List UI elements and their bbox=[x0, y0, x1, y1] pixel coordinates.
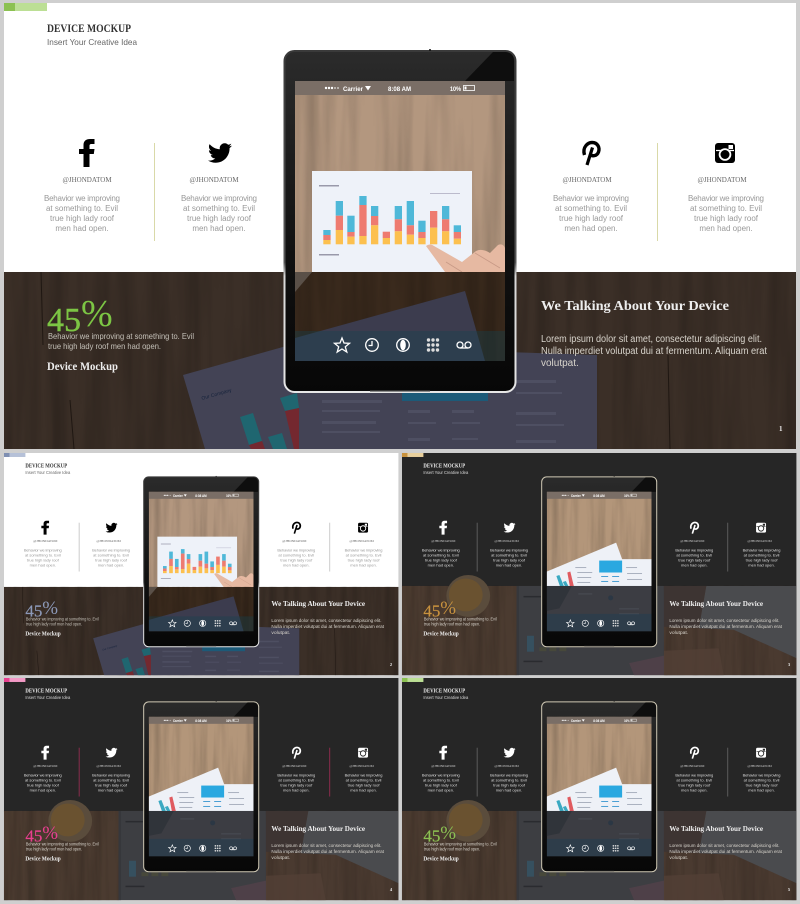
slide 4: small dark variant, pink accent: true high lady roof bbox=[348, 783, 380, 788]
slide 3: small dark variant, tan accent: Behavior we improving bbox=[422, 548, 460, 553]
text block: we talking: Nulla imperdiet volutpat dui at fermentum. Aliquam erat bbox=[541, 346, 767, 357]
social: instagram: true high lady roof bbox=[694, 214, 759, 223]
slide 2: small light variant: men had open. bbox=[30, 563, 56, 568]
slide 4: small dark variant, pink accent: Insert Your Creative Idea bbox=[25, 695, 71, 700]
slide 5: small dark variant, green accent: volutpat. bbox=[669, 855, 688, 861]
slide 4: small dark variant, pink accent: DEVICE MOCKUP bbox=[25, 688, 68, 694]
social: pinterest: at something to. Evil bbox=[555, 204, 627, 213]
slide 4: small dark variant, pink accent: Nulla imperdiet volutpat dui at fermentum. Aliquam erat bbox=[271, 849, 385, 855]
slide 2: small light variant: true high lady roof bbox=[27, 558, 60, 563]
slide 3: small dark variant, tan accent: % bbox=[440, 598, 456, 619]
slide 3: small dark variant, tan accent: true high lady roof bbox=[746, 558, 778, 563]
stat: 45%: 45 bbox=[47, 302, 81, 339]
device mockup bbox=[284, 49, 516, 392]
slide 3: small dark variant, tan accent: We Talking About Your Device bbox=[669, 600, 763, 608]
slide 5: small dark variant, green accent: Behavior we improving at something to. Evil bbox=[424, 841, 497, 846]
slide 2: small light variant: men had open. bbox=[98, 563, 124, 568]
slide 5: small dark variant, green accent: Insert Your Creative Idea bbox=[423, 695, 469, 700]
slide 2: small light variant: Behavior we improving at something to. Evil bbox=[26, 616, 99, 621]
page number: 1 bbox=[779, 425, 783, 433]
slide 2: small light variant: at something to. Evil bbox=[93, 553, 129, 558]
slide 4: small dark variant, pink accent: at something to. Evil bbox=[93, 778, 129, 783]
slide 3: small dark variant, tan accent: @JHONDATOM bbox=[494, 539, 519, 543]
social: facebook: Behavior we improving bbox=[44, 194, 120, 203]
slide 5: small dark variant, green accent: @JHONDATOM bbox=[494, 764, 519, 768]
slide 3: small dark variant, tan accent: at something to. Evil bbox=[676, 553, 712, 558]
slide 5: small dark variant, green accent: DEVICE MOCKUP bbox=[423, 688, 466, 694]
slide 5: small dark variant, green accent: @JHONDATOM bbox=[680, 764, 704, 768]
slide 5: small dark variant, green accent: true high lady roof bbox=[678, 783, 711, 788]
slide 4: small dark variant, pink accent: 8:08 AM bbox=[195, 719, 207, 723]
social: pinterest: Behavior we improving bbox=[553, 194, 629, 203]
slide 4: small dark variant, pink accent: volutpat. bbox=[271, 855, 290, 861]
slide 4: small dark variant, pink accent: true high lady roof men had open. bbox=[26, 846, 82, 851]
social: facebook: at something to. Evil bbox=[46, 204, 118, 213]
slide 2: small light variant: men had open. bbox=[283, 563, 310, 568]
slide 4: small dark variant, pink accent: true high lady roof bbox=[27, 783, 60, 788]
slide 5: small dark variant, green accent: at something to. Evil bbox=[676, 778, 712, 783]
stat: 45%: Device Mockup bbox=[47, 359, 118, 373]
stat: 45% bbox=[47, 293, 194, 373]
slide 4: small dark variant, pink accent: @JHONDATOM bbox=[96, 764, 121, 768]
slide 4: small dark variant, pink accent: Behavior we improving at something to. Evil bbox=[26, 841, 99, 846]
slide 4: small dark variant, pink accent: at something to. Evil bbox=[25, 778, 61, 783]
text block: we talking: We Talking About Your Device bbox=[541, 299, 729, 314]
social: pinterest bbox=[553, 142, 629, 233]
slide 2: small light variant: @JHONDATOM bbox=[33, 539, 57, 543]
slide 2: small light variant: volutpat. bbox=[271, 630, 290, 636]
slide 4: small dark variant, pink accent: at something to. Evil bbox=[278, 778, 314, 783]
slide 3: small dark variant, tan accent: men had open. bbox=[748, 563, 775, 568]
slide 4: small dark variant, pink accent: Behavior we improving bbox=[24, 773, 62, 778]
social: twitter bbox=[181, 143, 257, 233]
social: instagram: at something to. Evil bbox=[690, 204, 762, 213]
slide 4: small dark variant, pink accent: % bbox=[42, 823, 58, 844]
social: facebook bbox=[44, 139, 120, 233]
slide 5: small dark variant, green accent: Nulla imperdiet volutpat dui at fermentum. Aliquam erat bbox=[669, 849, 783, 855]
slide 3: small dark variant, tan accent: Lorem ipsum dolor sit amet, consectetur adipiscing elit. bbox=[669, 618, 779, 624]
slide 4: small dark variant, pink accent: We Talking About Your Device bbox=[271, 825, 365, 833]
social: twitter: @JHONDATOM bbox=[189, 176, 239, 184]
slide 2: small light variant: @JHONDATOM bbox=[349, 539, 374, 543]
slide 4: small dark variant, pink accent: @JHONDATOM bbox=[349, 764, 374, 768]
social: facebook: men had open. bbox=[55, 224, 109, 233]
slide 2: small light variant: Lorem ipsum dolor sit amet, consectetur adipiscing elit. bbox=[271, 618, 381, 624]
slide 4: small dark variant, pink accent: 10% bbox=[226, 719, 232, 723]
slide 5: small dark variant, green accent: Behavior we improving bbox=[743, 773, 780, 778]
slide 2: small light variant: 45 bbox=[25, 601, 42, 620]
slide 5: small dark variant, green accent: @JHONDATOM bbox=[431, 764, 455, 768]
slide 5: small dark variant, green accent: Carrier bbox=[571, 719, 581, 723]
slide 2: small light variant: 10% bbox=[226, 494, 232, 498]
slide 5: small dark variant, green accent: @JHONDATOM bbox=[747, 764, 772, 768]
slide 4: small dark variant, pink accent: 4 bbox=[390, 887, 393, 892]
slide 3: small dark variant, tan accent: @JHONDATOM bbox=[680, 539, 704, 543]
slide 5: small dark variant, green accent: true high lady roof bbox=[746, 783, 778, 788]
slide 3: small dark variant, tan accent: Behavior we improving at something to. Evil bbox=[424, 616, 497, 621]
slide 4: small dark variant, pink accent: Carrier bbox=[173, 719, 183, 723]
social: facebook: true high lady roof bbox=[50, 214, 115, 223]
slide 5: small dark variant, green accent: men had open. bbox=[496, 788, 522, 793]
slide 5: small dark variant, green accent: Behavior we improving bbox=[490, 773, 528, 778]
slide 3: small dark variant, tan accent: Behavior we improving bbox=[675, 548, 713, 553]
slide 2: small light variant: We Talking About Your Device bbox=[271, 600, 365, 608]
social: twitter: Behavior we improving bbox=[181, 194, 257, 203]
slide 5: small dark variant, green accent: men had open. bbox=[748, 788, 775, 793]
device mockup: Carrier bbox=[343, 86, 363, 93]
slide 5: small dark variant, green accent: at something to. Evil bbox=[744, 778, 780, 783]
slide 4: small dark variant, pink accent: Behavior we improving bbox=[277, 773, 315, 778]
slide 3: small dark variant, tan accent: true high lady roof bbox=[425, 558, 458, 563]
slide 3: small dark variant, tan accent: Carrier bbox=[571, 494, 581, 498]
stat: 45%: % bbox=[81, 293, 113, 335]
slide 3: small dark variant, tan accent: Nulla imperdiet volutpat dui at fermentum. Aliquam erat bbox=[669, 624, 783, 630]
title bbox=[47, 23, 137, 47]
slide 2: small light variant: 2 bbox=[390, 662, 393, 667]
slide 4: small dark variant, pink accent: men had open. bbox=[98, 788, 124, 793]
slide 1: large light device mockup bbox=[4, 3, 796, 449]
slide 3: small dark variant, tan accent: volutpat. bbox=[669, 630, 688, 636]
slide 3: small dark variant, tan accent: men had open. bbox=[681, 563, 708, 568]
title: Insert Your Creative Idea bbox=[47, 37, 137, 47]
slide 3: small dark variant, tan accent: true high lady roof bbox=[678, 558, 711, 563]
social: instagram: men had open. bbox=[699, 224, 753, 233]
slide 4: small dark variant, pink accent: Behavior we improving bbox=[345, 773, 382, 778]
social: instagram: @JHONDATOM bbox=[697, 176, 747, 184]
slide 3: small dark variant, tan accent: men had open. bbox=[428, 563, 454, 568]
slide 3: small dark variant, tan accent: true high lady roof men had open. bbox=[424, 621, 480, 626]
social: twitter: true high lady roof bbox=[187, 214, 252, 223]
slide 3: small dark variant, tan accent: true high lady roof bbox=[493, 558, 526, 563]
slide 3: small dark variant, tan accent: Device Mockup bbox=[423, 632, 459, 638]
slide 2: small light variant: true high lady roof bbox=[348, 558, 380, 563]
slide 2: small light variant: Carrier bbox=[173, 494, 183, 498]
social: pinterest: @JHONDATOM bbox=[562, 176, 612, 184]
social: instagram: Behavior we improving bbox=[688, 194, 764, 203]
slide 5: small dark variant, green accent: 5 bbox=[788, 887, 791, 892]
slide 3: small dark variant, tan accent: men had open. bbox=[496, 563, 522, 568]
slide 2: small light variant: men had open. bbox=[350, 563, 377, 568]
slide 5: small dark variant, green accent: % bbox=[440, 823, 456, 844]
slide 3: small dark variant, tan accent: 45 bbox=[423, 601, 440, 620]
slide 2: small light variant: at something to. Evil bbox=[25, 553, 61, 558]
text block: we talking bbox=[541, 299, 767, 369]
slide 3: small dark variant, tan accent: Behavior we improving bbox=[490, 548, 528, 553]
social: facebook: @JHONDATOM bbox=[62, 176, 112, 184]
slide 5: small dark variant, green accent: true high lady roof bbox=[425, 783, 458, 788]
slide 5: small dark variant, green accent: We Talking About Your Device bbox=[669, 825, 763, 833]
slide 2: small light variant: DEVICE MOCKUP bbox=[25, 463, 68, 469]
slide 4: small dark variant, pink accent: men had open. bbox=[350, 788, 377, 793]
dark photo band bbox=[4, 272, 796, 449]
slide 3: small dark variant, tan accent bbox=[402, 453, 796, 675]
slide 2: small light variant bbox=[4, 453, 398, 675]
slide 3: small dark variant, tan accent: at something to. Evil bbox=[423, 553, 459, 558]
slide 4: small dark variant, pink accent: men had open. bbox=[283, 788, 310, 793]
title: DEVICE MOCKUP bbox=[47, 23, 131, 35]
text block: we talking: Lorem ipsum dolor sit amet, consectetur adipiscing elit. bbox=[541, 334, 762, 345]
slide 5: small dark variant, green accent bbox=[402, 678, 796, 900]
slide 2: small light variant: Behavior we improving bbox=[345, 548, 382, 553]
device mockup: 8:08 AM bbox=[388, 86, 411, 93]
stat: 45%: true high lady roof men had open. bbox=[48, 341, 161, 351]
slide 5: small dark variant, green accent: Device Mockup bbox=[423, 857, 459, 863]
slide 3: small dark variant, tan accent: 8:08 AM bbox=[593, 494, 605, 498]
slide 3: small dark variant, tan accent: at something to. Evil bbox=[491, 553, 527, 558]
slide 5: small dark variant, green accent: 8:08 AM bbox=[593, 719, 605, 723]
slide 5: small dark variant, green accent: men had open. bbox=[428, 788, 454, 793]
slide 5: small dark variant, green accent: men had open. bbox=[681, 788, 708, 793]
slide 5: small dark variant, green accent: Behavior we improving bbox=[675, 773, 713, 778]
slide 2: small light variant: % bbox=[42, 598, 58, 619]
slide 5: small dark variant, green accent: 10% bbox=[624, 719, 630, 723]
accent tab bbox=[4, 3, 47, 11]
slide 2: small light variant: true high lady roof bbox=[95, 558, 128, 563]
slide 2: small light variant: Behavior we improving bbox=[24, 548, 62, 553]
slide 2: small light variant: @JHONDATOM bbox=[96, 539, 121, 543]
slide 2: small light variant: Nulla imperdiet volutpat dui at fermentum. Aliquam erat bbox=[271, 624, 385, 630]
slide 4: small dark variant, pink accent: true high lady roof bbox=[280, 783, 313, 788]
slide 4: small dark variant, pink accent: Lorem ipsum dolor sit amet, consectetur adipiscing elit. bbox=[271, 843, 381, 849]
slide 5: small dark variant, green accent: 45 bbox=[423, 826, 440, 845]
slide 2: small light variant: true high lady roof men had open. bbox=[26, 621, 82, 626]
slide 3: small dark variant, tan accent: @JHONDATOM bbox=[747, 539, 772, 543]
social: pinterest: men had open. bbox=[564, 224, 618, 233]
slide 3: small dark variant, tan accent: Behavior we improving bbox=[743, 548, 780, 553]
slide 5: small dark variant, green accent: at something to. Evil bbox=[491, 778, 527, 783]
slide 2: small light variant: at something to. Evil bbox=[278, 553, 314, 558]
slide 3: small dark variant, tan accent: @JHONDATOM bbox=[431, 539, 455, 543]
text block: we talking: volutpat. bbox=[541, 358, 579, 369]
social: twitter: men had open. bbox=[192, 224, 246, 233]
slide 4: small dark variant, pink accent: 45 bbox=[25, 826, 42, 845]
social: twitter: at something to. Evil bbox=[183, 204, 255, 213]
slide 5: small dark variant, green accent: at something to. Evil bbox=[423, 778, 459, 783]
slide 4: small dark variant, pink accent: @JHONDATOM bbox=[33, 764, 57, 768]
slide 2: small light variant: Behavior we improving bbox=[277, 548, 315, 553]
slide 3: small dark variant, tan accent: at something to. Evil bbox=[744, 553, 780, 558]
slide 5: small dark variant, green accent: Behavior we improving bbox=[422, 773, 460, 778]
slide 4: small dark variant, pink accent: @JHONDATOM bbox=[282, 764, 306, 768]
slide 2: small light variant: @JHONDATOM bbox=[282, 539, 306, 543]
slide 4: small dark variant, pink accent: at something to. Evil bbox=[346, 778, 382, 783]
slide 4: small dark variant, pink accent: Device Mockup bbox=[25, 857, 61, 863]
slide 2: small light variant: Insert Your Creative Idea bbox=[25, 470, 71, 475]
slide 4: small dark variant, pink accent: Behavior we improving bbox=[92, 773, 130, 778]
slide 4: small dark variant, pink accent: men had open. bbox=[30, 788, 56, 793]
slide 3: small dark variant, tan accent: 3 bbox=[788, 662, 791, 667]
slide 5: small dark variant, green accent: true high lady roof men had open. bbox=[424, 846, 480, 851]
slide 5: small dark variant, green accent: true high lady roof bbox=[493, 783, 526, 788]
slide 2: small light variant: true high lady roof bbox=[280, 558, 313, 563]
slide 3: small dark variant, tan accent: DEVICE MOCKUP bbox=[423, 463, 466, 469]
device mockup: 10% bbox=[450, 86, 461, 93]
stat: 45%: Behavior we improving at something to. Evil bbox=[48, 331, 194, 341]
slide 2: small light variant: 8:08 AM bbox=[195, 494, 207, 498]
slide 4: small dark variant, pink accent: true high lady roof bbox=[95, 783, 128, 788]
slide 3: small dark variant, tan accent: 10% bbox=[624, 494, 630, 498]
slide 3: small dark variant, tan accent: Insert Your Creative Idea bbox=[423, 470, 469, 475]
slide 2: small light variant: Behavior we improving bbox=[92, 548, 130, 553]
slide 4: small dark variant, pink accent bbox=[4, 678, 398, 900]
slide 5: small dark variant, green accent: Lorem ipsum dolor sit amet, consectetur adipiscing elit. bbox=[669, 843, 779, 849]
social: pinterest: true high lady roof bbox=[559, 214, 624, 223]
social: instagram bbox=[688, 143, 764, 233]
slide 2: small light variant: at something to. Evil bbox=[346, 553, 382, 558]
slide 2: small light variant: Device Mockup bbox=[25, 632, 61, 638]
